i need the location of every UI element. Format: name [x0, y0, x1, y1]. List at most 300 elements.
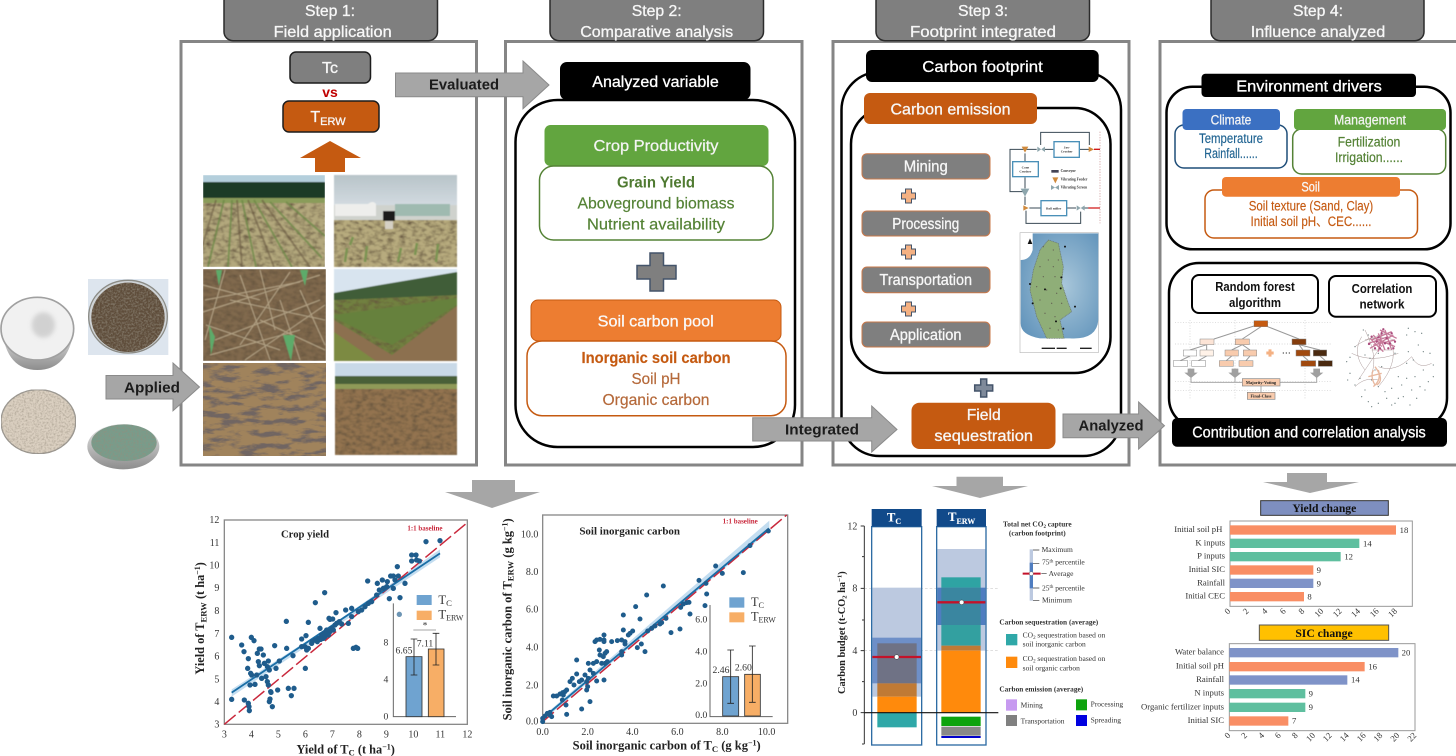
inset: mean yield bars: T [438, 608, 446, 622]
axis: carbon budget: 4 [852, 646, 857, 657]
arrow: evaluated [396, 61, 549, 109]
icon: brown powder dish [88, 279, 168, 355]
bars: yield change: 4 [1259, 606, 1270, 616]
card: soil: Soil texture (Sand, Clay) [1249, 199, 1373, 214]
legend: carbon sequestration: 2 [1033, 636, 1036, 641]
frame: carbon footprint [842, 72, 1121, 456]
legend: total net capture: th [1049, 585, 1054, 590]
arrow: down to budget chart [932, 477, 1028, 498]
chart: soil inorganic carbon scatter: C [712, 744, 718, 754]
chart: crop yield scatter: 4 [214, 697, 219, 708]
bars: SIC change: 4 [1256, 730, 1267, 740]
legend: total net capture: percentile [1053, 558, 1085, 567]
list: soil carbon variables: Soil pH [632, 371, 680, 388]
chart: crop yield scatter: Yield of T [296, 742, 349, 756]
panel: step 4 influence analyzed [1160, 42, 1456, 465]
icon: plus [902, 302, 916, 316]
chart: crop yield scatter: 4 [249, 730, 254, 741]
legend: carbon emission [999, 684, 1123, 726]
bars: yield change: 14 [1349, 606, 1363, 619]
bars: yield change: 6 [1278, 606, 1288, 616]
chart: soil inorganic carbon scatter: 2.0 [581, 727, 594, 738]
bars: yield change: 0 [1222, 606, 1232, 616]
card: climate: Rainfall...... [1204, 146, 1258, 161]
legend: total net capture: percentile [1053, 583, 1085, 592]
column: TERW: ERW [956, 517, 975, 526]
bars: yield change: 16 [1368, 606, 1381, 619]
inset: mean SIC bars: T [751, 595, 759, 609]
heading: step 1: Step 1: [305, 3, 355, 20]
column: TERW [937, 509, 986, 745]
panel: analysis methods group [1169, 263, 1447, 447]
bars: yield change [1174, 521, 1412, 619]
legend: total net capture: 2 [1043, 525, 1046, 530]
panel: environment drivers group [1166, 74, 1450, 249]
diagram: processing flowsheet: Crusher [1019, 169, 1032, 173]
card: soil: Soil [1301, 180, 1320, 195]
legend: carbon emission: Mining [1021, 700, 1043, 709]
banner: contribution and correlation analysis: Contribution and correlation analysis [1192, 424, 1426, 442]
block: field sequestration [912, 403, 1056, 449]
chart: soil inorganic carbon scatter: 6.0 [671, 727, 684, 738]
photo: straw mulch [203, 269, 326, 361]
bars: yield change: Rainfall [1197, 577, 1226, 587]
chart: soil inorganic carbon scatter: 1:1 baseline [723, 517, 758, 525]
chart: crop yield scatter: Yield of T [193, 623, 207, 675]
icon: white powder bowl [1, 297, 74, 370]
chart: crop yield scatter: 7 [214, 629, 219, 640]
arrow: down to driver charts [1263, 473, 1359, 493]
heading: environment drivers: Environment drivers [1236, 78, 1382, 95]
inset: mean SIC bars: 2.46 [713, 665, 730, 676]
card: management [1293, 109, 1446, 174]
heading: step 2: Comparative analysis [580, 24, 733, 41]
chart: crop yield scatter: (t ha [193, 575, 207, 602]
box: random forest: Random forest [1215, 279, 1295, 294]
heading: carbon emission [864, 93, 1037, 124]
bars: yield change: 2 [1241, 606, 1251, 616]
legend: carbon emission: Carbon emission (average) [999, 684, 1084, 693]
inset: mean SIC bars: C [759, 601, 765, 610]
arrow: analyzed: Analyzed [1078, 418, 1144, 434]
diagram: random forest tree: Majority-Voting [1246, 380, 1277, 385]
heading: carbon emission: Carbon emission [890, 102, 1010, 119]
chart: soil inorganic carbon scatter: Soil inorganic carbon [579, 526, 680, 538]
panel: analyzed variable group [516, 62, 795, 447]
inset: mean SIC bars: T [751, 610, 759, 624]
heading: carbon footprint: Carbon footprint [922, 59, 1043, 76]
chart: crop yield scatter: 7 [330, 730, 335, 741]
heading: step 2 [550, 0, 764, 41]
card: management: Fertilization [1338, 135, 1400, 150]
bars: SIC change: 2 [1239, 730, 1249, 740]
column: TC [872, 509, 922, 745]
arrow: up to treatment [300, 141, 361, 172]
frame: analysis methods [1169, 263, 1447, 428]
column: TC: T [887, 511, 895, 525]
block: crop productivity [544, 125, 768, 166]
axis: carbon budget: 8 [852, 584, 857, 595]
axis: carbon budget: ) [837, 571, 848, 575]
arrow: applied: Applied [124, 380, 180, 396]
icon: plus [637, 253, 676, 291]
inset: mean SIC bars: 6.0 [695, 614, 707, 625]
chart: soil inorganic carbon scatter: ) [500, 518, 514, 522]
card: climate: Temperature [1199, 131, 1263, 146]
diagram: processing flowsheet: Cone [1022, 165, 1030, 169]
arrow: evaluated: Evaluated [429, 78, 499, 94]
heading: step 2: Step 2: [632, 3, 682, 20]
bars: SIC change: 9 [1309, 702, 1313, 712]
inset: mean yield bars: 4 [384, 674, 389, 685]
heading: yield change [1261, 501, 1388, 515]
legend: total net capture: Maximum [1042, 545, 1073, 554]
legend: carbon emission: Spreading [1091, 715, 1121, 724]
stage: application [862, 322, 990, 347]
heading: step 4: Influence analyzed [1251, 24, 1385, 41]
chart: crop yield scatter: 1:1 baseline [407, 525, 442, 533]
axis: carbon budget: −1 [837, 575, 844, 582]
bars: yield change: Initial soil pH [1174, 524, 1222, 534]
chart: crop yield scatter: 9 [214, 583, 219, 594]
bars: yield change: K inputs [1195, 537, 1226, 547]
banner: contribution and correlation analysis [1172, 418, 1447, 447]
inset: mean yield bars: ERW [446, 614, 464, 623]
bars: yield change: Initial CEC [1185, 591, 1225, 601]
inset: mean yield bars: 6.65 [396, 645, 413, 656]
frame: carbon emission [851, 108, 1110, 373]
chart: crop yield scatter [193, 515, 472, 756]
bars: SIC change: Initial SIC [1188, 715, 1224, 725]
axis: carbon budget: 2 [842, 595, 849, 599]
heading: environment drivers [1202, 74, 1416, 97]
panel: step 3 footprint integrated [833, 42, 1129, 465]
arrow: down to yield charts [445, 480, 540, 508]
chart: crop yield scatter: ERW [198, 602, 208, 623]
icon: green powder bowl [87, 424, 159, 469]
axis: carbon budget: 12 [847, 521, 857, 532]
bars: SIC change: 14 [1351, 675, 1360, 685]
heading: analyzed variable [560, 62, 750, 100]
chart: soil inorganic carbon scatter: −1 [748, 739, 757, 748]
box: random forest: algorithm [1229, 295, 1281, 310]
bars: SIC change: Initial soil pH [1176, 660, 1224, 670]
bars: yield change: 10 [1312, 606, 1325, 619]
legend: carbon sequestration: CO [1023, 631, 1033, 640]
photo: maize field rows [196, 175, 325, 267]
icon group: rock powders [1, 279, 168, 469]
legend: total net capture: (carbon footprint) [1009, 528, 1066, 537]
box: TERW treatment [283, 101, 379, 132]
legend: carbon emission: Transportation [1021, 716, 1065, 725]
chart: crop yield scatter: 6 [303, 730, 308, 741]
box: random forest [1192, 275, 1318, 313]
chart: crop yield scatter: −1 [382, 742, 391, 751]
chart: crop yield scatter: (t ha [355, 742, 382, 756]
frame: analyzed variable [516, 100, 795, 447]
legend: carbon sequestration [999, 617, 1105, 672]
bars: yield change: 12 [1344, 552, 1353, 562]
chart: soil inorganic carbon scatter: 8.0 [526, 567, 538, 578]
list: soil carbon variables: Organic carbon [602, 392, 710, 409]
label: vs: vs [322, 84, 338, 100]
chart: soil inorganic carbon scatter: 8.0 [716, 727, 729, 738]
list: soil carbon variables [527, 341, 786, 416]
bars: yield change: 9 [1317, 578, 1321, 588]
bars: SIC change: 6 [1273, 730, 1283, 740]
block: crop productivity: Crop Productivity [594, 138, 718, 155]
axis: carbon budget: Carbon budget (t-CO [837, 599, 848, 694]
diagram: processing flowsheet: Ball miller [1046, 206, 1062, 210]
block: field sequestration: Field [967, 407, 1001, 424]
box: Tc control: Tc [322, 60, 338, 77]
bars: SIC change: N inputs [1194, 688, 1225, 698]
icon: beige powder dish [1, 390, 76, 454]
chart: soil inorganic carbon scatter: 0.0 [526, 716, 538, 727]
box: correlation network [1329, 276, 1436, 317]
frame: environment drivers [1166, 87, 1450, 249]
legend: carbon sequestration: soil organic carbon [1023, 663, 1080, 672]
box: TERW treatment: ERW [320, 116, 346, 128]
chart: drivers of yield and SIC change [1141, 501, 1418, 744]
bars: SIC change: 10 [1304, 730, 1317, 744]
panel: step 1 field application [181, 42, 476, 465]
heading: SIC change [1259, 625, 1389, 640]
chart: crop yield scatter: 5 [214, 674, 219, 685]
chart: soil inorganic carbon scatter: 0.0 [536, 727, 549, 738]
inset: mean yield bars: T [438, 593, 446, 607]
chart: crop yield scatter: ) [193, 562, 207, 566]
diagram: random forest tree [1173, 320, 1332, 399]
inset: mean SIC bars: 2.0 [695, 678, 707, 689]
arrow: integrated [753, 406, 897, 452]
list: crop variables: Grain Yield [617, 174, 695, 192]
bars: SIC change: 12 [1321, 730, 1334, 744]
inset: mean yield bars: 0 [384, 711, 389, 722]
list: soil carbon variables: Inorganic soil carbon [582, 350, 730, 367]
legend: carbon sequestration: CO [1023, 654, 1033, 663]
chart: crop yield scatter: 3 [214, 720, 219, 731]
legend: carbon sequestration: soil inorganic carbon [1023, 640, 1086, 649]
list: crop variables: Nutrient availability [587, 216, 725, 234]
list: crop variables: Aboveground biomass [578, 196, 734, 212]
card: climate [1175, 109, 1287, 168]
chart: crop yield scatter: 12 [462, 730, 472, 741]
icon: plus [975, 379, 993, 397]
card: soil [1205, 177, 1418, 238]
heading: analyzed variable: Analyzed variable [592, 74, 719, 91]
card: management: Irrigation...... [1335, 150, 1403, 165]
chart: crop yield scatter: 9 [384, 730, 389, 741]
inset: mean SIC bars: 2.60 [735, 663, 752, 674]
chart: crop yield scatter: 8 [214, 606, 219, 617]
stage: processing [862, 211, 990, 236]
heading: yield change: Yield change [1292, 502, 1356, 515]
inset: mean SIC bars: ERW [759, 616, 776, 625]
stage: mining: Mining [904, 159, 948, 176]
legend: carbon sequestration: 2 [1033, 659, 1036, 664]
chart: soil inorganic carbon scatter: 2.0 [526, 680, 538, 691]
diagram: random forest tree: Final-Class [1251, 393, 1272, 398]
bars: yield change: 8 [1296, 606, 1306, 616]
chart: carbon budget [837, 509, 1123, 745]
stage: transportation [862, 267, 990, 293]
bars: yield change: 8 [1307, 592, 1312, 602]
bars: SIC change: 22 [1405, 730, 1418, 744]
chart: crop yield scatter: 6 [214, 652, 219, 663]
legend: carbon sequestration: Carbon sequestration (average) [999, 617, 1099, 626]
card: soil: Initial soil pH、CEC...... [1250, 214, 1372, 229]
chart: crop yield scatter: 8 [357, 730, 362, 741]
chart: crop yield scatter: 10 [209, 561, 219, 572]
stage: processing: Processing [892, 216, 959, 233]
legend: total net capture: Average [1049, 569, 1074, 578]
arrow: applied [106, 363, 200, 411]
block: field sequestration: sequestration [934, 428, 1033, 445]
bars: SIC change: Rainfall [1196, 674, 1225, 684]
box: Tc control [290, 52, 370, 83]
arrow: integrated: Integrated [785, 423, 859, 439]
heading: step 4: Step 4: [1293, 3, 1343, 20]
chart: soil inorganic carbon scatter: ERW [506, 560, 516, 581]
legend: total net capture: 25 [1042, 583, 1049, 592]
diagram: processing flowsheet: Crusher [1061, 150, 1073, 154]
box: TERW treatment: T [310, 109, 320, 126]
chart: soil inorganic carbon scatter: 4.0 [626, 727, 639, 738]
bars: SIC change: 20 [1402, 647, 1410, 657]
chart: crop yield scatter: 12 [209, 515, 219, 526]
legend: carbon sequestration: sequestration based on [1036, 654, 1105, 663]
chart: soil inorganic carbon scatter: 6.0 [526, 605, 538, 616]
column: TERW: T [948, 510, 956, 524]
chart: soil inorganic carbon scatter [500, 515, 788, 754]
legend: carbon emission: Processing [1091, 700, 1123, 709]
stage: transportation: Transportation [880, 272, 972, 289]
chart: correlation network [1347, 328, 1433, 407]
inset: mean SIC bars [695, 595, 776, 721]
inset: mean yield bars: C [446, 598, 452, 608]
column: TC: C [895, 517, 901, 526]
bars: SIC change: 7 [1292, 716, 1297, 726]
bars: SIC change: Water balance [1175, 647, 1224, 657]
bars: SIC change: 16 [1368, 661, 1378, 671]
chart: crop yield scatter: 3 [222, 730, 227, 741]
chart: crop yield scatter: 10 [408, 730, 418, 741]
bars: SIC change: 8 [1290, 730, 1300, 740]
inset: mean yield bars: 7.11 [417, 639, 433, 650]
heading: step 3: Step 3: [958, 3, 1008, 20]
diagram: processing flowsheet: Jaw [1064, 146, 1070, 150]
inset: mean yield bars [384, 593, 464, 722]
chart: soil inorganic carbon scatter: 10.0 [521, 530, 538, 541]
diagram: processing flowsheet: Vibrating Feeder [1061, 178, 1088, 182]
block: soil carbon pool [531, 300, 781, 341]
bars: yield change: 9 [1317, 565, 1321, 575]
diagram: processing flowsheet: Vibrating Screen [1061, 186, 1087, 190]
legend: total net capture: Minimum [1042, 596, 1072, 605]
bars: SIC change: 9 [1309, 688, 1313, 698]
chart: crop yield scatter: 5 [276, 730, 281, 741]
legend: total net capture: 75 [1042, 558, 1049, 567]
inset: mean yield bars: * [423, 620, 428, 631]
panel: carbon footprint group [842, 50, 1121, 456]
bars: SIC change [1141, 644, 1418, 744]
chart: soil inorganic carbon scatter: (g kg [500, 530, 514, 561]
chart: crop yield scatter: 11 [210, 538, 219, 549]
card: climate: Climate [1211, 112, 1251, 127]
bars: SIC change: 18 [1371, 730, 1384, 744]
photo: field with greenhouse [334, 175, 457, 267]
bars: SIC change: 20 [1388, 730, 1401, 744]
photo: green plot with ditch [334, 269, 457, 361]
map: study region [1020, 233, 1098, 353]
axis: carbon budget [837, 521, 998, 744]
inset: mean SIC bars: 4.0 [695, 646, 707, 657]
bars: yield change: P inputs [1197, 551, 1226, 561]
list: crop variables [540, 166, 773, 240]
chart: soil inorganic carbon scatter: (g kg [718, 739, 749, 753]
photo: harvested field [335, 363, 457, 455]
box: correlation network: network [1360, 296, 1405, 312]
chart: crop yield scatter: Crop yield [281, 529, 329, 540]
heading: step 1 [224, 0, 438, 41]
diagram: processing flowsheet: Conveyor [1061, 169, 1076, 173]
bars: SIC change: 16 [1355, 730, 1368, 744]
chart: crop yield scatter: ) [391, 742, 395, 756]
heading: step 1: Field application [274, 24, 392, 41]
inset: mean yield bars: 8 [384, 637, 389, 648]
chart: crop yield scatter: 11 [436, 730, 445, 741]
legend: carbon sequestration: sequestration based on [1036, 631, 1105, 640]
bars: yield change: Initial SIC [1189, 564, 1225, 574]
card: management: Management [1334, 112, 1406, 127]
heading: step 4 [1211, 0, 1424, 41]
chart: soil inorganic carbon scatter: −1 [500, 522, 509, 531]
axis: carbon budget: ha [837, 582, 848, 595]
heading: SIC change: SIC change [1295, 627, 1353, 640]
photo: soil surface [203, 363, 326, 456]
chart: soil inorganic carbon scatter: 10.0 [758, 727, 775, 738]
chart: soil inorganic carbon scatter: 4.0 [526, 642, 538, 653]
legend: total net capture: Total net CO [1003, 520, 1043, 529]
legend: total net capture: th [1049, 559, 1054, 564]
axis: carbon budget: 0 [852, 708, 857, 719]
diagram: processing flowsheet [1010, 132, 1100, 223]
bars: yield change: 18 [1386, 606, 1399, 619]
chart: crop yield scatter: −1 [193, 566, 202, 575]
bars: SIC change: 0 [1222, 730, 1232, 740]
arrow: analyzed [1063, 402, 1164, 449]
block: soil carbon pool: Soil carbon pool [598, 314, 714, 330]
bars: SIC change: 14 [1338, 730, 1351, 744]
chart: soil inorganic carbon scatter: Soil inorganic carbon of T [500, 581, 514, 720]
heading: carbon footprint [866, 50, 1099, 82]
icon: plus [902, 245, 916, 259]
icon: plus [902, 189, 916, 203]
legend: total net capture: capture [1046, 520, 1072, 529]
legend: total net capture [1003, 520, 1085, 605]
chart: soil inorganic carbon scatter: ) [757, 739, 761, 753]
stage: application: Application [890, 327, 962, 344]
inset: mean SIC bars: 0.0 [695, 710, 707, 721]
bars: yield change: 14 [1363, 538, 1372, 548]
bars: yield change: 12 [1331, 606, 1344, 619]
stage: mining [862, 154, 990, 179]
panel: step 2 comparative analysis [506, 42, 802, 465]
chart: soil inorganic carbon scatter: Soil inorganic carbon of T [573, 739, 712, 753]
bars: SIC change: Organic fertilizer inputs [1141, 701, 1225, 711]
bars: yield change: 18 [1400, 525, 1408, 535]
